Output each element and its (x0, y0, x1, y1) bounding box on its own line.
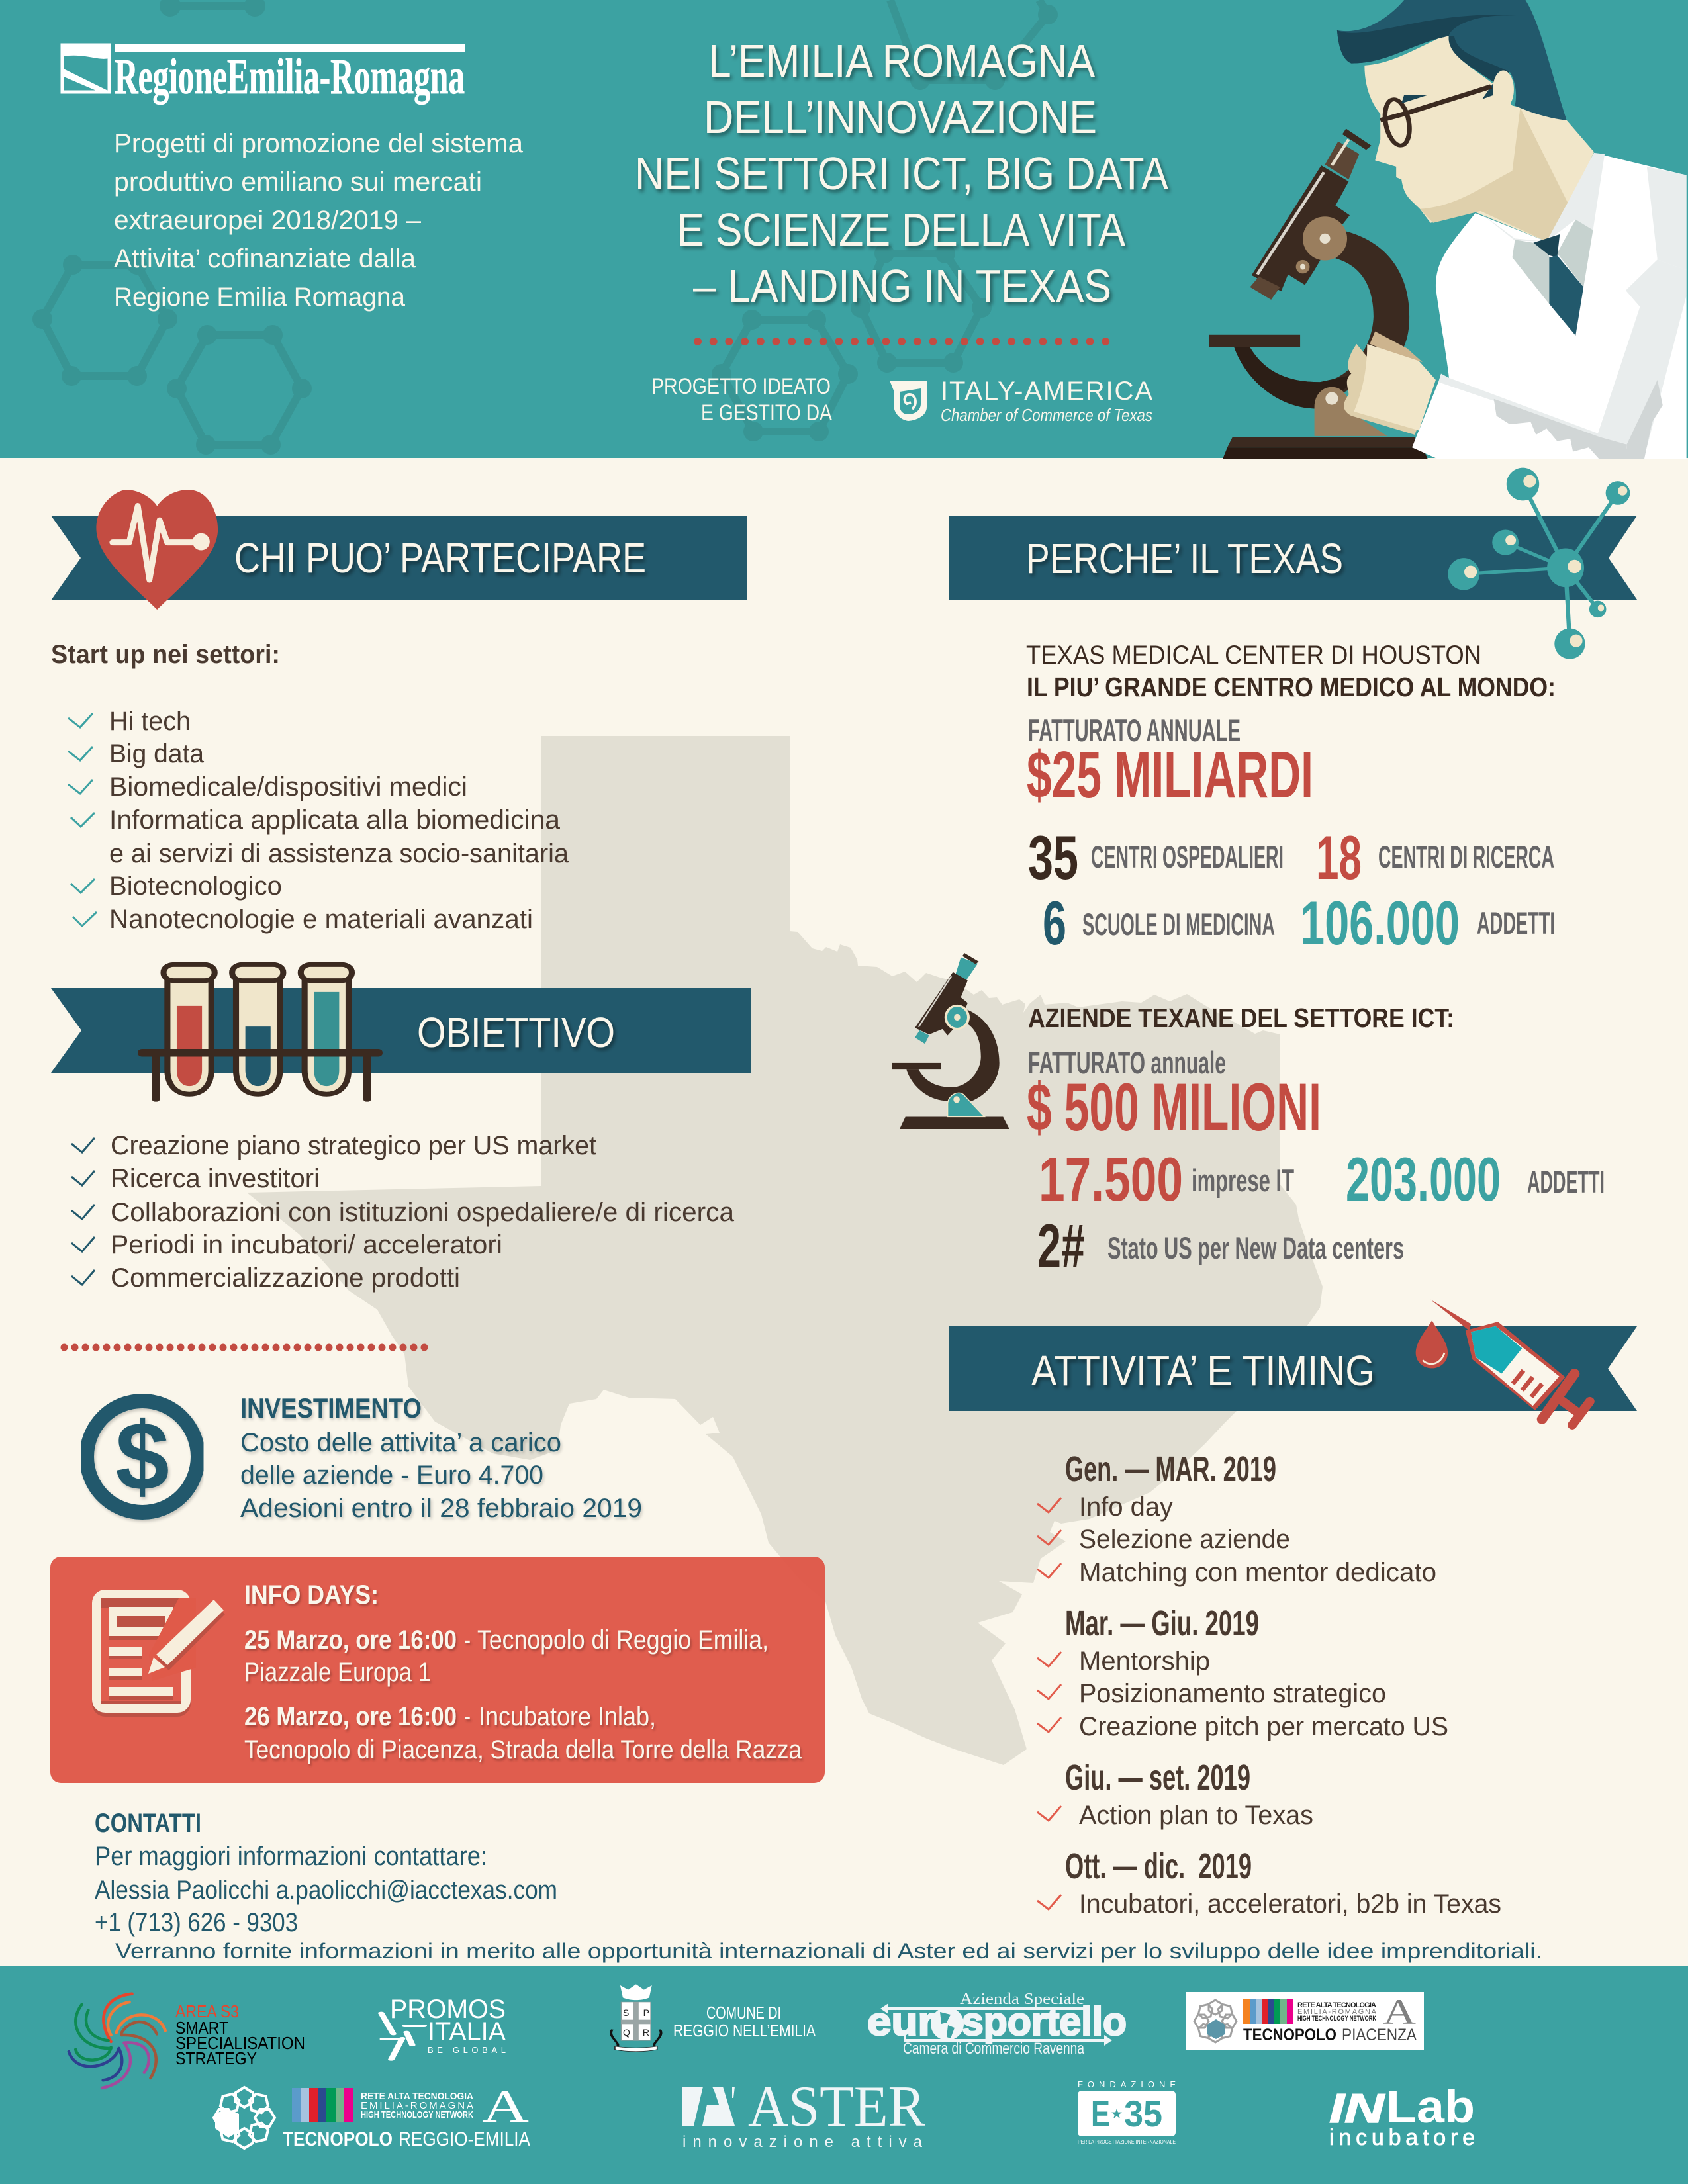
icon: test tubes (138, 964, 383, 1102)
header description text (114, 129, 524, 312)
stat: 17.500 IT companies: 17.500 (1039, 1144, 1183, 1214)
checklist: sectors: Informatica applicata alla biomedicina (109, 805, 561, 835)
medical center text: TEXAS MEDICAL CENTER DI HOUSTON (1026, 641, 1481, 670)
managed by text: E GESTITO DA (701, 400, 832, 426)
logo: Tecnopolo Piacenza: RETE ALTA TECNOLOGIA (1297, 2001, 1376, 2009)
info days text: Piazzale Europa 1 (244, 1658, 431, 1687)
investment text: INVESTIMENTO (240, 1392, 422, 1424)
logo: Fondazione E35: ★ (1111, 2107, 1123, 2120)
logo: Comune di Reggio nell'Emilia: S P (623, 2007, 649, 2018)
logo: Tecnopolo Reggio-Emilia: EMILIA-ROMAGNA (361, 2100, 473, 2111)
icon: note and pen (92, 1590, 225, 1717)
checklist: objectives (71, 1131, 735, 1293)
shirt, collar and tie (1478, 153, 1605, 242)
header band (0, 0, 1688, 458)
stat: 18 research centers: 18 (1316, 823, 1362, 892)
logo: Eurosportello: Azienda Speciale (960, 1991, 1084, 2008)
timeline: Giu - Set 2019: Action plan to Texas (1079, 1801, 1313, 1830)
microscope tube (1325, 142, 1359, 179)
logo: InLab incubatore (1329, 2081, 1475, 2150)
logo: Italy-America Chamber of Commerce: Chamber of Commerce of Texas (941, 405, 1152, 425)
managed by text (651, 374, 832, 426)
ribbon: attivita' e timing (949, 1326, 1637, 1411)
stat: 106.000 employees: 106.000 (1300, 888, 1460, 958)
investment text: delle aziende - Euro 4.700 (240, 1461, 543, 1490)
checklist: objectives: Collaborazioni con istituzioni ospedaliere/e di ricerca (111, 1198, 735, 1227)
logo: Tecnopolo Reggio-Emilia: TECNOPOLO (283, 2128, 393, 2150)
logo: Eurosportello: eur (867, 1999, 935, 2044)
title (635, 35, 1168, 312)
timeline: Mar - Giu 2019 (1037, 1604, 1448, 1741)
contacts text: Per maggiori informazioni contattare: (95, 1842, 487, 1871)
info days text: Tecnopolo di Reggio Emilia, (477, 1625, 769, 1655)
heading: CHI PUO’ PARTECIPARE (234, 534, 646, 582)
logo: Promos Italia: ITALIA (428, 2017, 506, 2046)
checklist: sectors (68, 707, 569, 934)
logo: Tecnopolo Reggio-Emilia: HIGH TECHNOLOGY NETWORK (361, 2109, 473, 2120)
footer band (0, 1966, 1688, 2184)
logo: Regione Emilia-Romagna: RegioneEmilia-Romagna (115, 49, 465, 105)
logo: Tecnopolo Reggio-Emilia: RETE ALTA TECNOLOGIA (361, 2091, 473, 2102)
logo: Aster (682, 2075, 925, 2151)
info days text (244, 1580, 802, 1764)
glasses (1380, 87, 1491, 147)
timeline: Gen - Mar 2019 (1037, 1449, 1436, 1587)
ribbon: obiettivo (51, 988, 751, 1073)
stat: 18 research centers (1316, 823, 1554, 892)
timeline: Gen - Mar 2019: Selezione aziende (1079, 1525, 1290, 1554)
stat: 6 medical schools (1043, 888, 1275, 958)
stat: annual revenue: $25 MILIARDI (1027, 738, 1313, 812)
checklist: sectors: e ai servizi di assistenza socio-sanitaria (109, 839, 569, 868)
checklist: sectors: Hi tech (109, 707, 191, 736)
logo: Tecnopolo Reggio-Emilia: A (482, 2081, 530, 2132)
header description text: extraeuropei 2018/2019 – (114, 206, 422, 235)
logo: Eurosportello (867, 1991, 1127, 2058)
logo: Tecnopolo Reggio-Emilia: REGGIO-EMILIA (399, 2128, 530, 2150)
panel: obiettivo (51, 964, 751, 1293)
contacts text: +1 (713) 626 - 9303 (95, 1908, 298, 1937)
stat: 203.000 employees: ADDETTI (1527, 1164, 1605, 1199)
logo: Tecnopolo Piacenza: A (1383, 1992, 1416, 2032)
logo: Area S3: AREA S3 (175, 2001, 239, 2021)
panel: attivita' e timing (949, 1300, 1637, 1919)
ribbon: chi puo' partecipare (51, 516, 747, 600)
contacts text: Alessia Paolicchi a.paolicchi@iacctexas.com (95, 1876, 557, 1905)
timeline: Mar - Giu 2019: Posizionamento strategico (1079, 1679, 1386, 1708)
logo: Tecnopolo Piacenza: EMILIA-ROMAGNA (1297, 2008, 1377, 2016)
sleeve (1412, 376, 1627, 459)
microscope stage (1209, 335, 1300, 347)
logo: Promos Italia: PROMOS (390, 1995, 506, 2024)
title: L’EMILIA ROMAGNA (708, 35, 1095, 87)
checklist: objectives: Ricerca investitori (111, 1164, 320, 1193)
info days text: Tecnopolo di Piacenza, Strada della Torre della Razza (244, 1735, 802, 1764)
logo: Tecnopolo Piacenza: TECNOPOLO (1243, 2026, 1336, 2044)
illustration: scientist with microscope (1209, 0, 1687, 459)
info days text: INFO DAYS: (244, 1580, 379, 1610)
icon: molecule (1448, 468, 1630, 659)
logo: Comune di Reggio nell'Emilia: Q R (623, 2027, 649, 2038)
panel: perche' il texas (892, 468, 1637, 1281)
stat: annual revenue (1027, 713, 1313, 812)
logo: Area S3 (69, 1994, 305, 2088)
stat: 203.000 employees: 203.000 (1346, 1144, 1501, 1214)
ICT companies heading: AZIENDE TEXANE DEL SETTORE ICT: (1028, 1003, 1454, 1033)
logo: Fondazione E35 (1078, 2079, 1176, 2145)
logo: Aster: innovazione attiva (682, 2133, 923, 2151)
investment text: Costo delle attivita’ a carico (240, 1428, 561, 1457)
logo: InLab incubatore: IN (1329, 2086, 1385, 2132)
icon: microscope (892, 953, 1009, 1129)
header description text: Regione Emilia Romagna (114, 283, 406, 312)
checklist: objectives: Commercializzazione prodotti (111, 1263, 460, 1293)
timeline: Gen - Mar 2019: Info day (1079, 1492, 1173, 1522)
subheading: Start up nei settori: (51, 640, 280, 669)
logo: Area S3: SMART (175, 2018, 228, 2038)
icon: dollar coin (87, 1401, 198, 1512)
logo: Italy-America Chamber of Commerce: ITALY-AMERICA (941, 377, 1152, 406)
managed by text: PROGETTO IDEATO (651, 374, 831, 399)
stat: second state for data centers: 2# (1037, 1211, 1085, 1281)
timeline: Mar - Giu 2019: Mar. — Giu. 2019 (1065, 1604, 1259, 1643)
stat: 35 hospital centers (1028, 823, 1284, 892)
investment text (240, 1392, 642, 1523)
logo: Promos Italia: BE GLOBAL (428, 2045, 506, 2055)
contacts text (95, 1809, 557, 1937)
hair (1337, 0, 1567, 120)
logo: Area S3: SPECIALISATION (175, 2033, 305, 2053)
icon: heart with heartbeat (96, 490, 218, 610)
icon: syringe and blood drop (1416, 1300, 1590, 1425)
face and neck (1364, 34, 1594, 242)
timeline: Gen - Mar 2019: Matching con mentor dedicato (1079, 1558, 1436, 1587)
logo: Fondazione E35: E (1091, 2093, 1110, 2134)
microscope stand and base (1315, 387, 1387, 436)
logo: Tecnopolo Piacenza: PIACENZA (1342, 2026, 1417, 2044)
stat: annual revenue: FATTURATO ANNUALE (1028, 713, 1241, 748)
logo: Italy-America Chamber of Commerce (890, 377, 1152, 425)
icon: dollar coin: $ (115, 1402, 169, 1511)
timeline: Ott - Dic 2019 (1037, 1846, 1501, 1919)
stat: 6 medical schools: 6 (1043, 888, 1066, 958)
timeline: Mar - Giu 2019: Creazione pitch per mercato US (1079, 1712, 1448, 1741)
medical center text (1026, 641, 1556, 702)
checklist: objectives: Periodi in incubatori/ acceleratori (111, 1230, 502, 1259)
header description text: Attivita’ cofinanziate dalla (114, 244, 416, 273)
logo: Regione Emilia-Romagna (62, 44, 465, 105)
medical center text: IL PIU’ GRANDE CENTRO MEDICO AL MONDO: (1027, 672, 1556, 702)
heading: OBIETTIVO (417, 1009, 615, 1056)
panel: investimento (87, 1392, 642, 1523)
timeline: Gen - Mar 2019: Gen. — MAR. 2019 (1065, 1449, 1276, 1489)
stat: second state for data centers: Stato US per New Data centers (1107, 1230, 1404, 1265)
timeline: Ott - Dic 2019: Incubatori, acceleratori, b2b in Texas (1079, 1889, 1501, 1919)
logo: InLab incubatore: incubatore (1329, 2125, 1475, 2150)
info days text: - (464, 1702, 471, 1731)
stat: ICT revenue: FATTURATO annuale (1028, 1045, 1226, 1080)
timeline: Ott - Dic 2019: Ott. — dic. 2019 (1065, 1846, 1252, 1886)
stat: second state for data centers (1037, 1211, 1404, 1281)
title: NEI SETTORI ICT, BIG DATA (635, 148, 1168, 199)
contacts text: CONTATTI (95, 1809, 201, 1838)
hand (1344, 344, 1420, 435)
logo: Tecnopolo Piacenza: HIGH TECHNOLOGY NETWORK (1297, 2015, 1376, 2023)
stat: 6 medical schools: SCUOLE DI MEDICINA (1082, 907, 1275, 942)
note line about Aster: Verranno fornite informazioni in merito alle opportunità internazionali di Aster ed ai servizi per lo sviluppo delle idee imprenditoriali. (115, 1939, 1542, 1963)
logo: Area S3: STRATEGY (175, 2048, 257, 2068)
lab coat (1412, 153, 1687, 459)
checklist: sectors: Nanotecnologie e materiali avanzati (109, 905, 533, 934)
logo: Comune di Reggio nell'Emilia: REGGIO NELL’EMILIA (673, 2021, 816, 2040)
logo: Promos Italia (381, 1995, 506, 2060)
logo: Aster: ASTER (748, 2075, 925, 2139)
stat: 35 hospital centers: CENTRI OSPEDALIERI (1091, 839, 1284, 874)
heading: PERCHE’ IL TEXAS (1026, 535, 1343, 582)
stat: 18 research centers: CENTRI DI RICERCA (1378, 839, 1554, 874)
header description text: produttivo emiliano sui mercati (114, 167, 482, 197)
stat: ICT revenue (1027, 1045, 1321, 1145)
stat: 106.000 employees: ADDETTI (1477, 905, 1555, 940)
logo: Comune di Reggio nell'Emilia: COMUNE DI (706, 2003, 781, 2023)
logo: Eurosportello: sportello (962, 1999, 1127, 2044)
map of Texas background (247, 736, 1323, 1765)
logo: Fondazione E35: PER LA PROGETTAZIONE INTERNAZIONALE (1078, 2139, 1176, 2145)
stat: ICT revenue: $ 500 MILIONI (1027, 1069, 1321, 1145)
stat: 17.500 IT companies: imprese IT (1192, 1163, 1294, 1198)
logo: Eurosportello: Camera di Commercio Ravenna (903, 2040, 1085, 2058)
logo: Tecnopolo Piacenza (1186, 1992, 1424, 2050)
stat: 35 hospital centers: 35 (1028, 823, 1078, 892)
microscope arm (1234, 232, 1409, 408)
info days text: 26 Marzo, ore 16:00 (244, 1702, 457, 1731)
info days text: Incubatore Inlab, (479, 1702, 656, 1731)
timeline: Mar - Giu 2019: Mentorship (1079, 1647, 1210, 1676)
logo: Fondazione E35: FONDAZIONE (1078, 2079, 1176, 2089)
panel: info days (50, 1557, 825, 1783)
heading: ATTIVITA’ E TIMING (1031, 1347, 1375, 1394)
checklist: sectors: Biotecnologico (109, 872, 282, 901)
logo: Fondazione E35: 35 (1124, 2093, 1162, 2134)
info days text: 25 Marzo, ore 16:00 (244, 1625, 457, 1655)
checklist: objectives: Creazione piano strategico per US market (111, 1131, 596, 1160)
timeline: Giu - Set 2019: Giu. — set. 2019 (1065, 1758, 1250, 1797)
title: – LANDING IN TEXAS (693, 260, 1111, 312)
ear (1493, 71, 1514, 109)
logo: Tecnopolo Reggio-Emilia (214, 2081, 530, 2150)
logo: Comune di Reggio nell'Emilia (611, 1984, 816, 2052)
checklist: sectors: Biomedicale/dispositivi medici (109, 772, 467, 801)
header description text: Progetti di promozione del sistema (114, 129, 524, 158)
panel: chi puo' partecipare (51, 490, 747, 934)
investment text: Adesioni entro il 28 febbraio 2019 (240, 1494, 642, 1523)
info days text: - (464, 1625, 471, 1655)
ribbon: perche' il texas (949, 516, 1637, 600)
logo: InLab incubatore: Lab (1386, 2081, 1475, 2132)
checklist: sectors: Big data (109, 739, 205, 768)
timeline: Giu - Set 2019 (1037, 1758, 1313, 1830)
title: E SCIENZE DELLA VITA (677, 204, 1125, 255)
title: DELL’INNOVAZIONE (704, 91, 1097, 143)
